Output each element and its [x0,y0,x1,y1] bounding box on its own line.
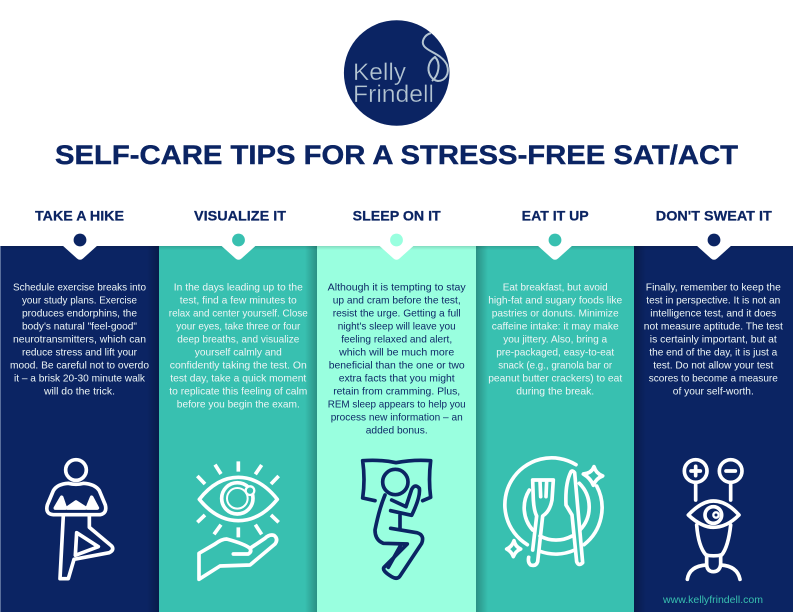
icon: eye head with plus and minus [684,460,742,579]
text block: visualize it: test, find a few minutes to [180,294,297,306]
marker: don't sweat it notch and dot [696,234,732,260]
icon: eye above hand [197,461,279,579]
panel: eat it up background [476,246,634,612]
text block: visualize it: before you begin the exam. [177,398,300,410]
text block: don't sweat it: not measure aptitude. The test [644,320,783,332]
text block: don't sweat it: Finally, remember to keep the [646,282,781,294]
text block: take a hike: produces endorphins, the [22,308,137,320]
icon: tree pose figure [47,460,113,579]
text block: don't sweat it: of your self-worth. [673,386,754,398]
text block: visualize it: your eyes, take three or four [176,320,301,332]
marker: sleep on it notch and dot [378,234,414,260]
text block: sleep on it: night's sleep will leave you [338,320,456,332]
text block: eat it up [488,282,622,398]
heading: take a hike: TAKE A HIKE [35,208,124,224]
text block: sleep on it [328,282,466,436]
text block: don't sweat it: intelligence test, and it does [650,308,776,320]
text block: take a hike: it – a brisk 20-30 minute walk [14,372,146,384]
text block: eat it up: you jittery. Also, bring a [503,334,607,346]
heading: sleep on it: SLEEP ON IT [353,208,441,224]
text block: sleep on it: process new information – an [331,412,463,424]
heading: eat it up: EAT IT UP [522,208,589,224]
heading: don't sweat it: DON'T SWEAT IT [656,208,772,224]
text block: visualize it: relax and center yourself. Close [169,308,308,320]
text block: visualize it: deep breaths, and visualize [177,334,299,346]
logo [344,20,450,126]
marker: eat it up notch and dot [537,234,573,260]
text block: take a hike: your study plans. Exercise [22,294,137,306]
text block: don't sweat it: is certainly important, but at [650,334,777,346]
marker: take a hike notch and dot [62,234,98,260]
marker: visualize it notch and dot [220,234,256,260]
text block: visualize it: test day, take a quick moment [170,372,306,384]
text block: sleep on it: resist the urge. Getting a full [333,308,461,320]
text block: don't sweat it: test in perspective. It is not an [646,294,780,306]
text block: eat it up: caffeine intake: it may make [492,320,619,332]
text block: visualize it: In the days leading up to the [174,282,303,294]
text block: eat it up: during the break. [516,386,594,398]
text block: eat it up: snack (e.g., granola bar or [498,360,613,372]
text block: don't sweat it: the end of the day, it is just a [649,346,777,358]
text block: sleep on it: which will be much more [338,346,454,358]
text block: sleep on it: added bonus. [366,424,428,436]
text block: eat it up: peanut butter crackers) to eat [488,372,622,384]
panel: don't sweat it background [634,246,793,612]
text block: visualize it: confidently taking the test. On [170,360,307,372]
text block: eat it up: Eat breakfast, but avoid [503,282,608,294]
text block: sleep on it: REM sleep appears to help you [328,398,466,410]
text block: take a hike: Schedule exercise breaks into [13,282,146,294]
text block: take a hike: reduce stress and lift your [22,346,137,358]
icon: person sleeping on pillow [363,460,431,578]
panel: sleep on it background [317,246,476,612]
logo: Kelly [353,59,406,86]
text block: visualize it: to replicate this feeling of calm [169,386,308,398]
text block: don't sweat it [644,282,783,398]
text block: sleep on it: feeling relaxed and alert, [341,334,452,346]
text block: take a hike: mood. Be careful not to overdo [10,360,149,372]
text block: sleep on it: beneficial than the one or two [329,360,465,372]
text block: sleep on it: up and cram before the test, [333,294,461,306]
icon: plate with fork and knife [505,458,603,565]
text block: eat it up: high-fat and sugary foods like [488,294,622,306]
text block: sleep on it: retain from cramming. Plus, [333,386,460,398]
text block: take a hike: will do the trick. [43,386,115,398]
text block: take a hike [10,282,149,398]
text block: visualize it: yourself calmly and [195,346,282,358]
text block: take a hike: neurotransmitters, which can [13,334,146,346]
logo: Frindell [353,81,434,108]
text block: visualize it [169,282,308,410]
heading: visualize it: VISUALIZE IT [194,208,286,224]
text block: eat it up: pre-packaged, easy-to-eat [496,346,614,358]
title: SELF-CARE TIPS FOR A STRESS-FREE SAT/ACT [55,140,739,170]
text block: eat it up: pastries or donuts. Minimize [492,308,619,320]
text block: don't sweat it: scores to become a measure [649,372,778,384]
text block: take a hike: body's natural "feel-good" [22,320,137,332]
text block: sleep on it: extra facts that you might [339,372,455,384]
text block: don't sweat it: test. Do not allow your test [653,360,773,372]
panel: visualize it background [159,246,317,612]
panel: take a hike background [0,246,159,612]
website url: www.kellyfrindell.com [662,595,763,606]
text block: sleep on it: Although it is tempting to stay [328,282,466,294]
